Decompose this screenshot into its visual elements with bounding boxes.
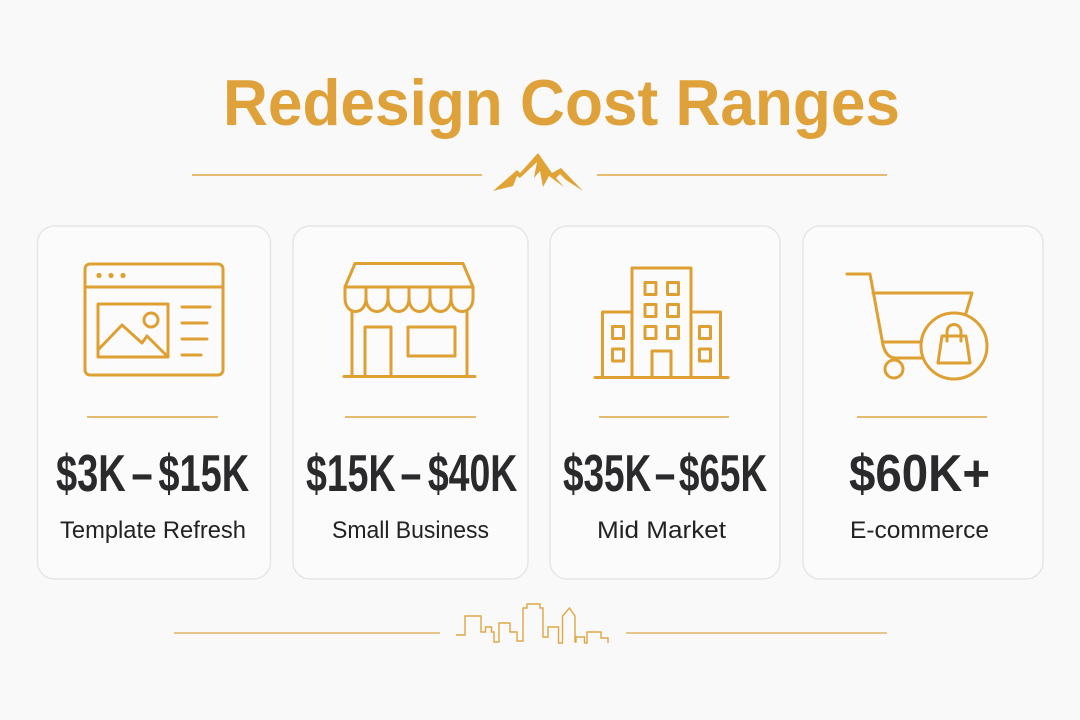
price: $15K–$40K [306,444,518,502]
title divider with mountain icon [192,153,887,191]
label: E-commerce [850,517,989,544]
icon: shopping cart with bag [847,274,987,379]
footer divider with skyline icon [174,604,887,643]
label: Mid Market [597,517,726,544]
panel: mid market [550,226,780,579]
price: $60K+ [849,445,990,503]
price: $3K–$15K [56,444,249,502]
label: Small Business [332,517,489,544]
title: Redesign Cost Ranges [223,66,900,139]
panel: small business [293,226,528,579]
icon: storefront [344,264,475,376]
icon: browser window [85,264,223,375]
panel: template refresh [38,226,270,579]
panel: e-commerce [803,226,1043,579]
label: Template Refresh [60,517,246,544]
icon: office building [595,268,728,378]
price: $35K–$65K [563,444,767,503]
